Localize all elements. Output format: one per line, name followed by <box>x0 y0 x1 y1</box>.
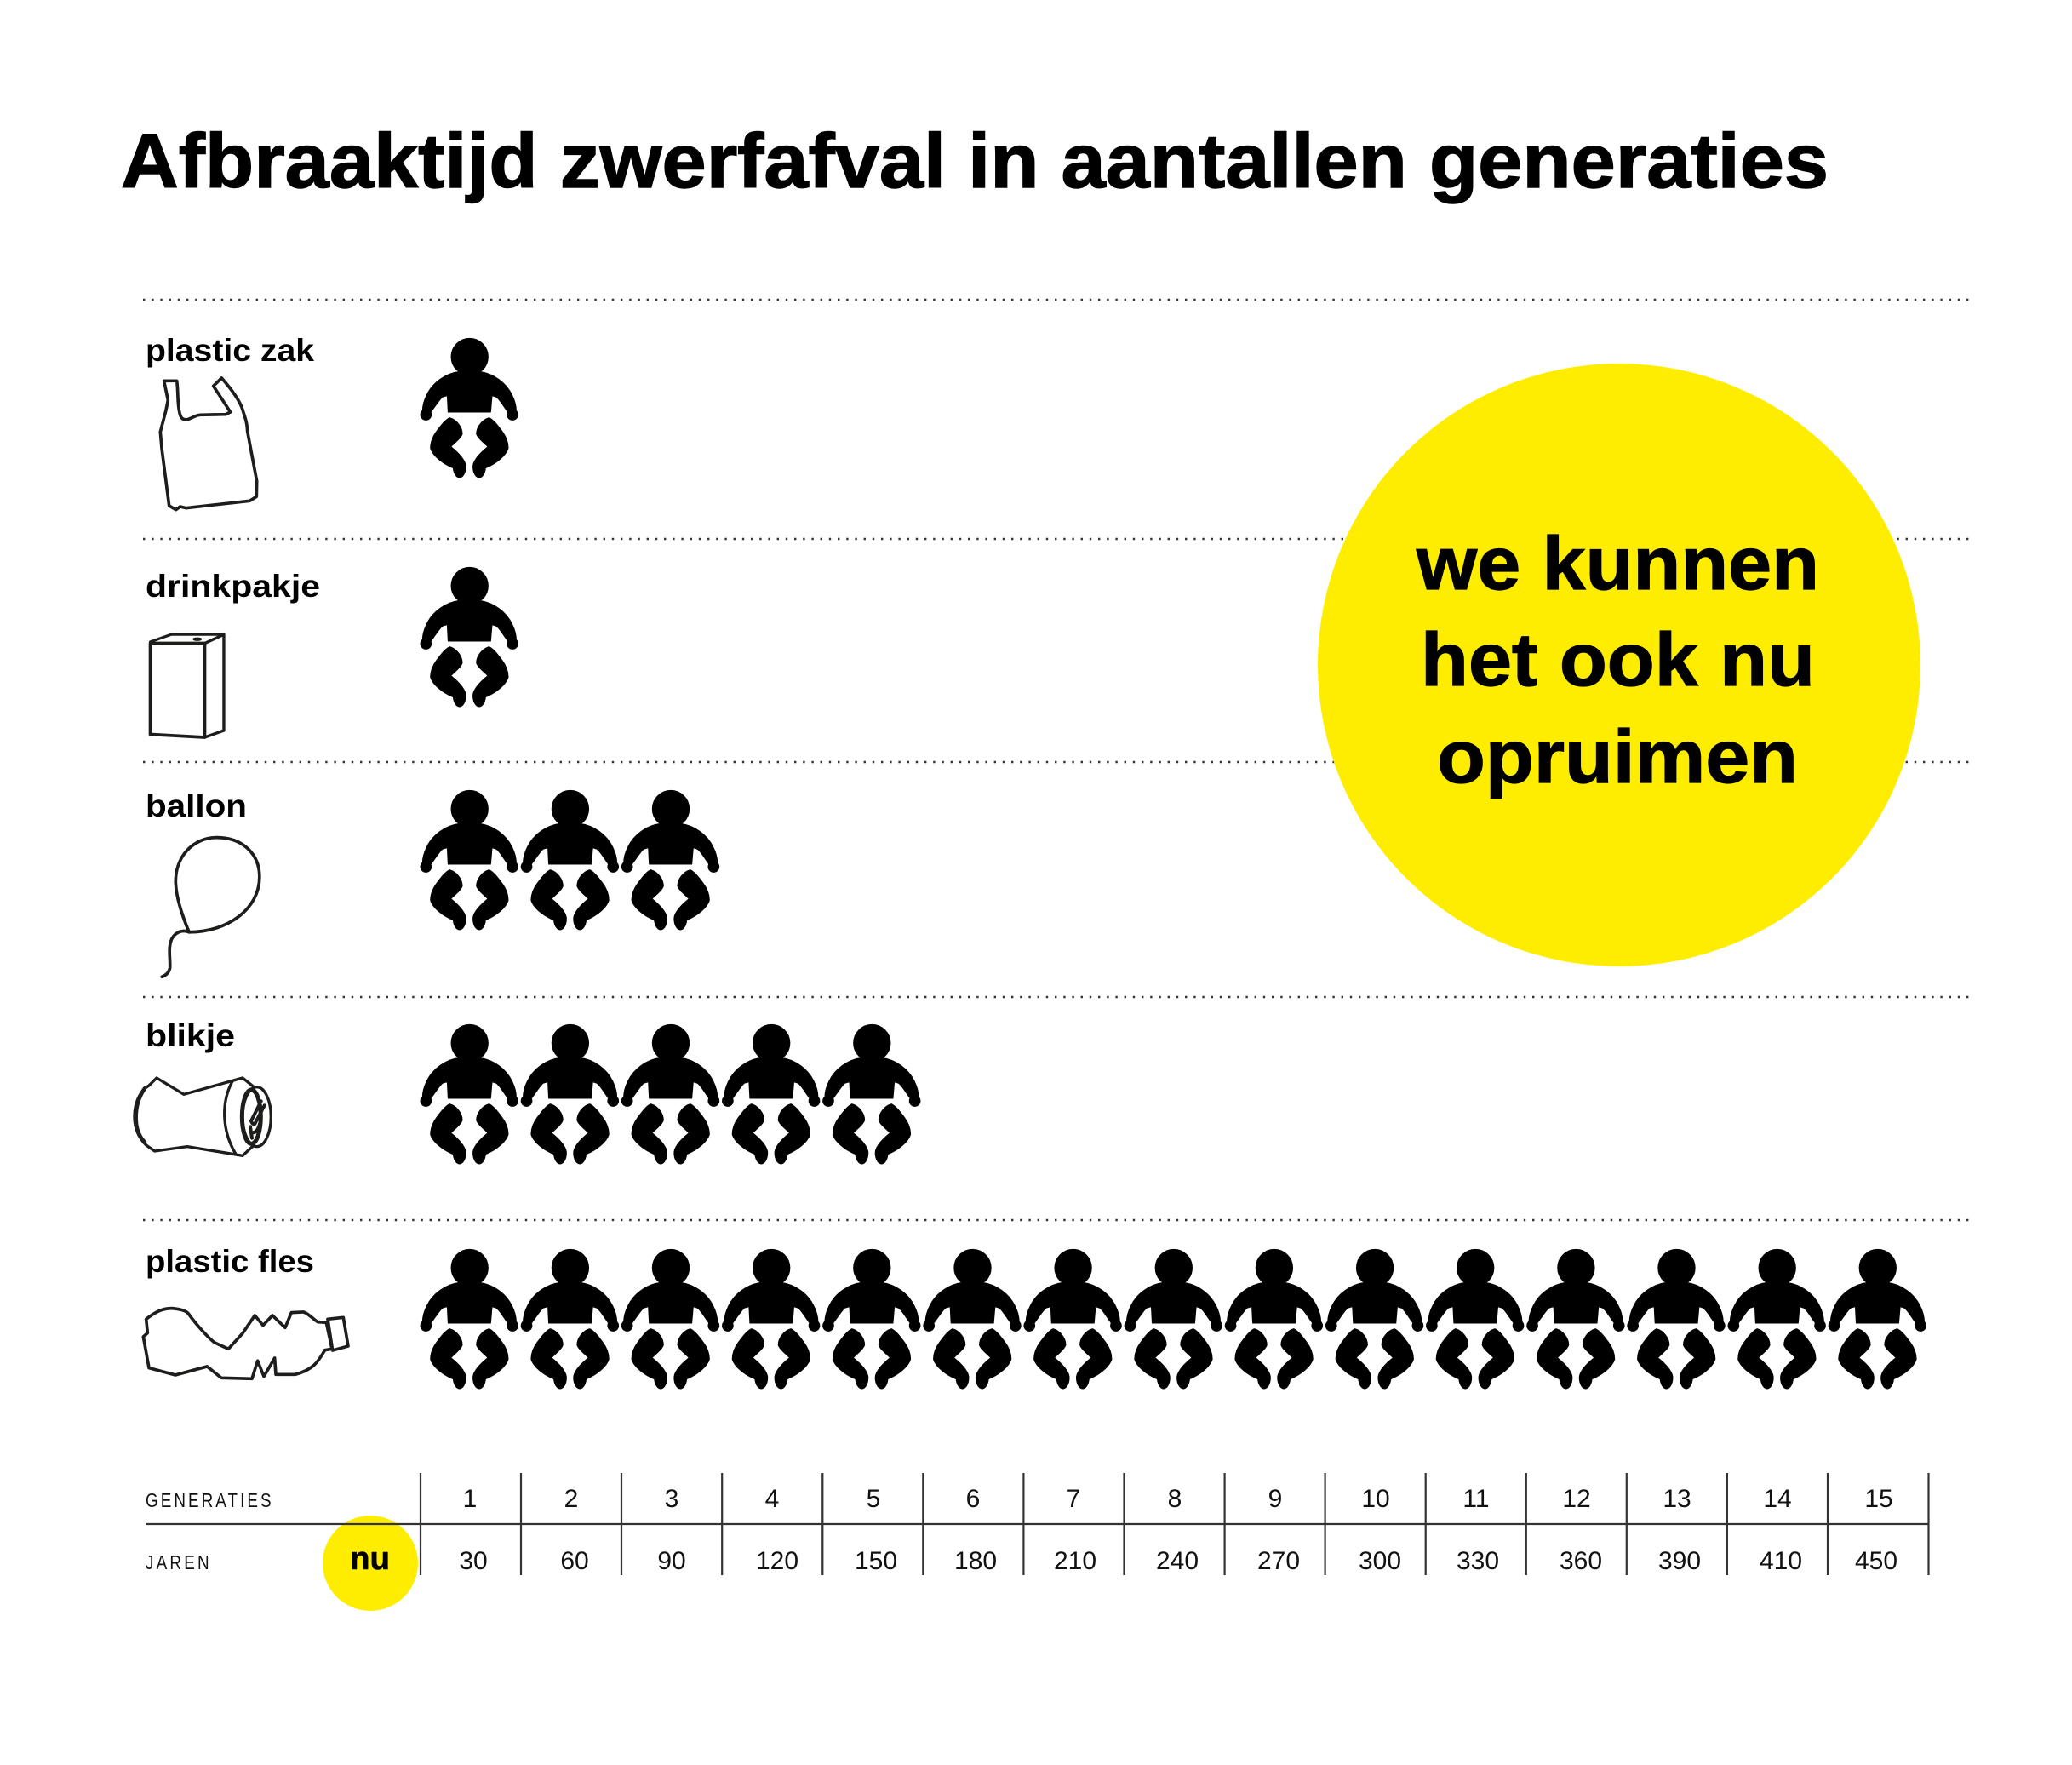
row: years: 410 <box>1760 1547 1802 1575</box>
title: Afbraaktijd zwerfafval in aantallen generaties <box>121 119 1829 204</box>
label: drinkpakje: drinkpakje <box>146 569 320 604</box>
generations: 1 <box>421 338 518 478</box>
row: years: 360 <box>1560 1547 1602 1575</box>
row: years: 120 <box>756 1547 798 1575</box>
row: years: 90 <box>657 1547 686 1575</box>
row: generation numbers: 5 <box>867 1485 880 1513</box>
row: generation numbers: 9 <box>1268 1485 1282 1513</box>
row: generation numbers <box>463 1485 1893 1513</box>
row: generation numbers: 1 <box>463 1485 477 1513</box>
row: generation numbers: 15 <box>1864 1485 1893 1513</box>
row: years <box>459 1547 1897 1575</box>
icon: crushed can <box>135 1078 271 1155</box>
icon: balloon <box>162 838 260 977</box>
generations: 3 <box>421 790 719 930</box>
icon: crushed bottle <box>143 1309 348 1378</box>
row: years: 240 <box>1156 1547 1199 1575</box>
row: generation numbers: 3 <box>665 1485 678 1513</box>
label: plastic fles: plastic fles <box>146 1244 314 1279</box>
callout: yellow circle <box>1318 364 1920 966</box>
panel: plastic zak <box>146 333 518 510</box>
row: generation numbers: 10 <box>1361 1485 1390 1513</box>
panel: blikje <box>135 1018 920 1164</box>
row: generation numbers: 7 <box>1067 1485 1080 1513</box>
callout: yellow circle: we kunnen <box>1416 521 1819 605</box>
row: generation numbers: 2 <box>564 1485 578 1513</box>
marker: nu <box>323 1516 418 1611</box>
row: years: 270 <box>1257 1547 1300 1575</box>
panel: ballon <box>146 788 719 977</box>
generations: 15 <box>421 1249 1926 1389</box>
row: years: 390 <box>1658 1547 1701 1575</box>
row: years: 450 <box>1855 1547 1897 1575</box>
row: years: 30 <box>459 1547 488 1575</box>
label: blikje: blikje <box>146 1018 235 1053</box>
row: generation numbers: 14 <box>1763 1485 1792 1513</box>
row header: generaties: GENERATIES <box>146 1490 272 1511</box>
callout: yellow circle: opruimen <box>1437 714 1798 799</box>
row: generation numbers: 8 <box>1168 1485 1182 1513</box>
panel: drinkpakje <box>146 567 518 737</box>
panel: plastic fles <box>143 1244 1926 1389</box>
generations: 5 <box>421 1024 920 1164</box>
row: years: 300 <box>1359 1547 1401 1575</box>
generations: 1 <box>421 567 518 707</box>
row: generation numbers: 4 <box>765 1485 779 1513</box>
callout: yellow circle: het ook nu <box>1421 617 1815 702</box>
row: generation numbers: 11 <box>1462 1485 1490 1513</box>
row: years: 330 <box>1457 1547 1499 1575</box>
icon: drink carton <box>151 634 224 737</box>
row: years: 210 <box>1054 1547 1096 1575</box>
row: generation numbers: 13 <box>1663 1485 1691 1513</box>
timeline table <box>146 1473 1929 1611</box>
label: plastic zak: plastic zak <box>146 333 314 368</box>
marker: nu: nu <box>350 1541 390 1577</box>
row: years: 180 <box>954 1547 997 1575</box>
label: ballon: ballon <box>146 788 247 823</box>
icon: plastic bag <box>160 378 257 510</box>
row: years: 60 <box>560 1547 589 1575</box>
row header: jaren: JAREN <box>146 1552 209 1573</box>
row: generation numbers: 12 <box>1562 1485 1591 1513</box>
row: generation numbers: 6 <box>966 1485 980 1513</box>
row: years: 150 <box>855 1547 897 1575</box>
